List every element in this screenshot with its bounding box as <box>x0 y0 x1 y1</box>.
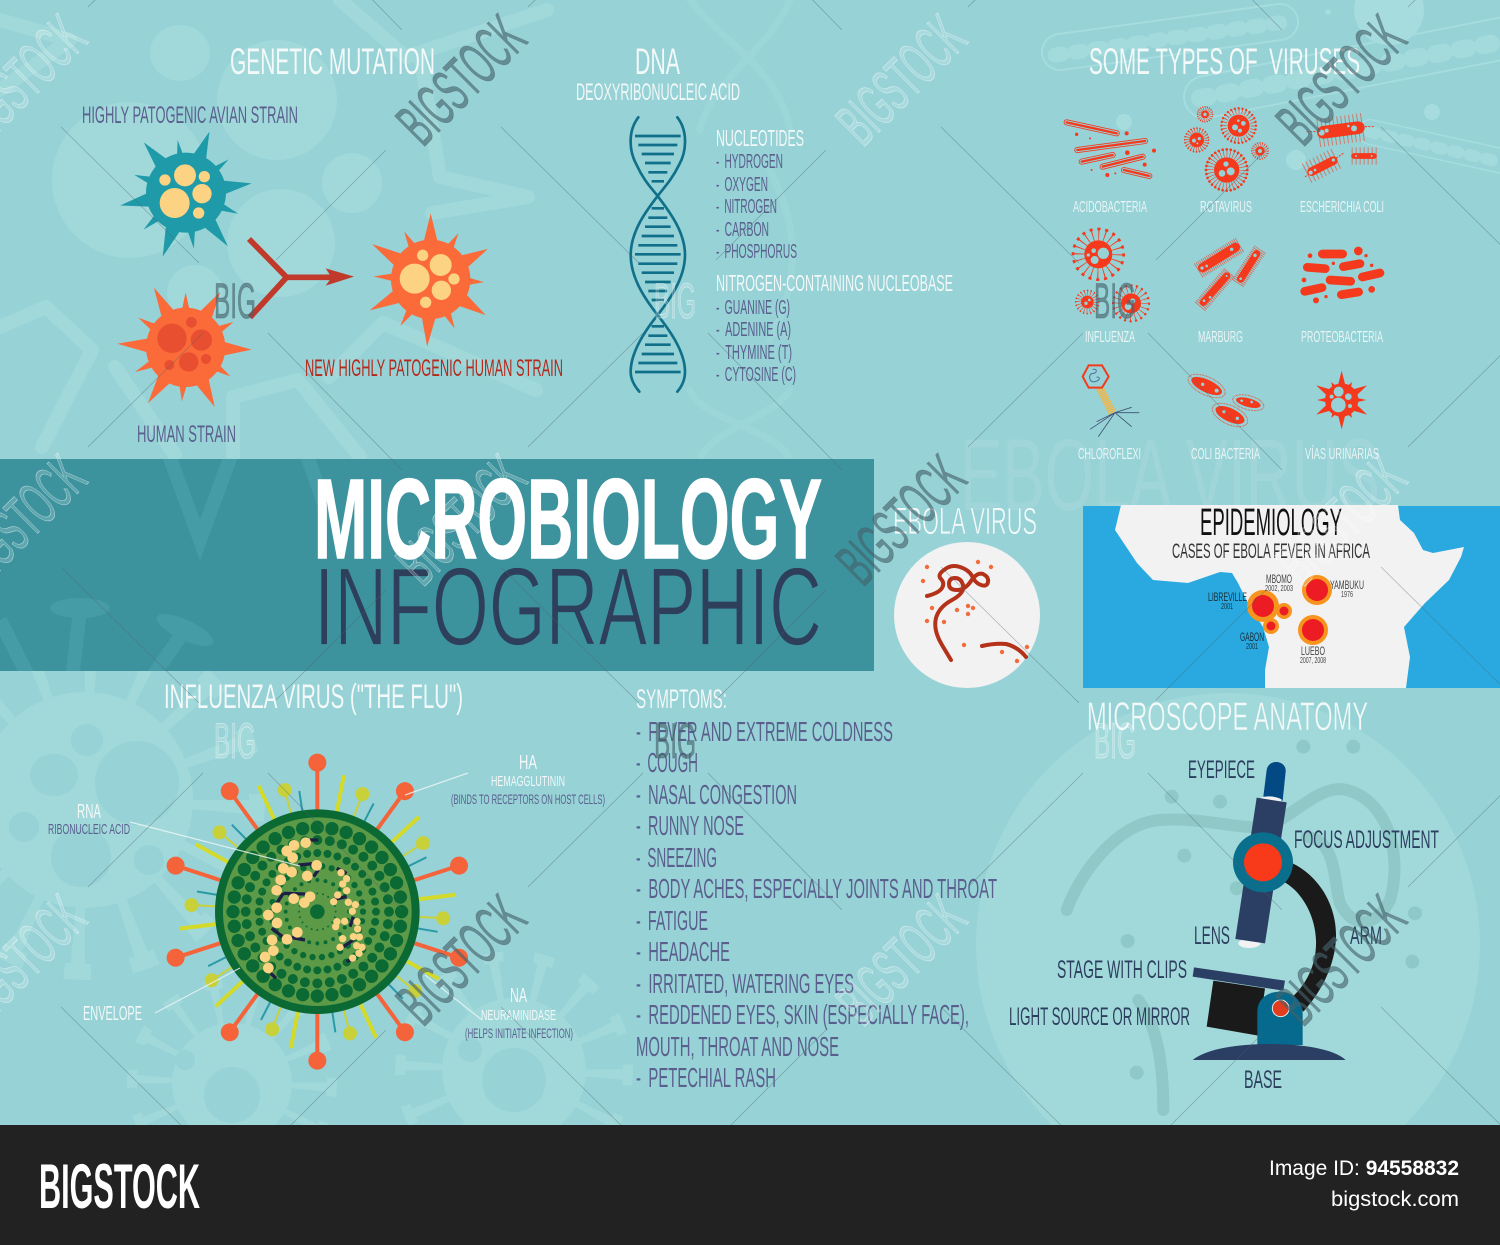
text block: symptoms: - FATIGUE <box>636 905 708 936</box>
outbreak markers <box>1247 575 1332 645</box>
text block: symptoms: MOUTH, THROAT AND NOSE <box>636 1031 839 1062</box>
virus labels: VÍAS URINARIAS <box>1305 444 1379 463</box>
panel: epidemiology map <box>1083 502 1500 688</box>
outbreak labels: 2001 <box>1246 642 1258 651</box>
text block: symptoms: - REDDENED EYES, SKIN (ESPECIALLY FACE), <box>636 999 969 1030</box>
panel: epidemiology map: EPIDEMIOLOGY <box>1200 502 1342 544</box>
virus labels: CHLOROFLEXI <box>1078 446 1141 463</box>
text block: symptoms: - RUNNY NOSE <box>636 810 744 841</box>
microscope labels: LENS <box>1194 922 1230 950</box>
text block: nucleobases: NITROGEN-CONTAINING NUCLEOBASE <box>716 270 953 296</box>
text block: nucleotides: - CARBON <box>716 219 769 241</box>
label: HA: HA <box>519 752 537 774</box>
icon: rotavirus <box>1185 107 1268 191</box>
text block: nucleobases: - THYMINE (T) <box>716 342 792 364</box>
text block: nucleotides <box>716 125 804 263</box>
text block: symptoms: - COUGH <box>636 747 698 778</box>
virus labels: ESCHERICHIA COLI <box>1300 199 1384 216</box>
label: envelope: ENVELOPE <box>83 1003 142 1025</box>
icon: new human strain virus <box>366 213 492 347</box>
watermarks: BIG <box>1094 713 1136 769</box>
icon: orange human virus <box>117 284 252 410</box>
heading: INFLUENZA VIRUS ("THE FLU") <box>164 678 463 716</box>
label: RNA: RIBONUCLEIC ACID <box>48 821 130 838</box>
label: human strain: HUMAN STRAIN <box>137 421 236 448</box>
panel: genetic mutation <box>82 41 563 448</box>
label: NA: (HELPS INITIATE INFECTION) <box>465 1025 573 1041</box>
microscope labels: LIGHT SOURCE OR MIRROR <box>1009 1003 1190 1031</box>
text block: symptoms: - PETECHIAL RASH <box>636 1062 776 1093</box>
label: HA: (BINDS TO RECEPTORS ON HOST CELLS) <box>451 791 605 807</box>
watermarks: BIG <box>1094 273 1136 329</box>
label: HA <box>451 752 605 807</box>
text block: symptoms: - HEADACHE <box>636 936 730 967</box>
icon: acidobacteria <box>1067 122 1156 177</box>
map of Africa <box>1083 505 1500 688</box>
panel: DNA <box>576 41 953 392</box>
image id: Image ID: 94558832 <box>1269 1157 1459 1180</box>
panel: influenza virus <box>48 678 605 1073</box>
microscope labels: BASE <box>1244 1066 1282 1094</box>
outbreak labels: GABON <box>1240 630 1264 644</box>
icon: ebola filament <box>894 542 1040 688</box>
text block: nucleobases: - ADENINE (A) <box>716 319 791 341</box>
icon: marburg <box>1198 245 1260 307</box>
virus labels: MARBURG <box>1198 329 1243 346</box>
outbreak labels <box>1208 572 1364 665</box>
label: avian strain: HIGHLY PATOGENIC AVIAN STRAIN <box>82 102 298 129</box>
label: NA: NA <box>510 985 527 1007</box>
label: RNA <box>48 801 130 838</box>
site url: bigstock.com <box>1331 1188 1459 1211</box>
label: NA: NEURAMINIDASE <box>481 1007 556 1024</box>
icon: vias urinarias <box>1314 371 1369 429</box>
text block: nucleotides: NUCLEOTIDES <box>716 125 804 151</box>
text block: symptoms: - BODY ACHES, ESPECIALLY JOINTS AND THROAT <box>636 873 997 904</box>
watermarks: BIG <box>214 273 256 329</box>
outbreak labels: 2007, 2008 <box>1300 656 1326 665</box>
watermarks <box>0 3 1419 1038</box>
right cell ghost <box>976 693 1480 1197</box>
virus labels: ROTAVIRUS <box>1200 199 1252 216</box>
arrow: strains merging <box>249 239 354 317</box>
label: HA: HEMAGGLUTININ <box>491 773 565 790</box>
text block: symptoms: - SNEEZING <box>636 842 717 873</box>
bacillus chains <box>1055 22 1500 165</box>
text block: nucleobases: - GUANINE (G) <box>716 297 790 319</box>
title: Microbiology: MICROBIOLOGY <box>314 456 822 582</box>
subheading: DEOXYRIBONUCLEIC ACID <box>576 79 740 106</box>
virus labels: COLI BACTERIA <box>1191 446 1260 463</box>
label: RNA: RNA <box>77 801 101 823</box>
microscope labels: STAGE WITH CLIPS <box>1057 956 1187 984</box>
outbreak labels: LUEBO <box>1301 644 1325 658</box>
watermarks: BIGSTOCK <box>384 443 539 598</box>
text block: symptoms: - IRRITATED, WATERING EYES <box>636 968 854 999</box>
icon: double helix <box>631 117 685 392</box>
watermarks: BIG <box>654 713 696 769</box>
text block: symptoms: - NASAL CONGESTION <box>636 779 797 810</box>
watermarks: BIG <box>654 273 696 329</box>
icon: microscope <box>1193 762 1346 1060</box>
left flu ghost <box>0 628 257 972</box>
heading: DNA <box>635 41 680 82</box>
label: NA <box>465 985 573 1041</box>
footer bar: BIGSTOCK <box>39 1152 200 1222</box>
outbreak labels: 2001 <box>1221 602 1233 611</box>
outbreak labels: 1976 <box>1341 590 1353 599</box>
heading: GENETIC MUTATION <box>230 41 435 82</box>
DNA ghost <box>690 0 792 460</box>
central title banner <box>0 450 874 680</box>
watermarks: BIGSTOCK <box>824 883 979 1038</box>
footer bar <box>0 1125 1500 1245</box>
outbreak labels: LIBREVILLE <box>1208 590 1247 604</box>
heading: EBOLA VIRUS <box>893 501 1037 543</box>
microscope labels: ARM <box>1350 922 1382 950</box>
icon: escherichia coli <box>1305 125 1378 177</box>
RNA strand <box>260 837 366 978</box>
outbreak labels: 2002, 2003 <box>1265 584 1293 593</box>
label: new strain: NEW HIGHLY PATOGENIC HUMAN STRAIN <box>305 355 563 382</box>
virus labels <box>1073 199 1384 463</box>
microscope labels <box>1009 756 1439 1094</box>
panel: microscope anatomy <box>1009 695 1439 1094</box>
icon: coli bacteria <box>1185 369 1266 431</box>
outbreak labels: YAMBUKU <box>1330 578 1364 592</box>
microscope labels: EYEPIECE <box>1188 756 1255 784</box>
icon: influenza virion <box>150 751 485 1073</box>
icon: chloroflexi phage <box>1083 365 1139 437</box>
virus labels: INFLUENZA <box>1085 329 1135 346</box>
panel: ebola virus <box>893 501 1040 688</box>
title: Infographic: INFOGRAPHIC <box>314 545 822 669</box>
icon: proteobacteria <box>1302 247 1380 303</box>
callout lines <box>130 773 482 1020</box>
watermarks: BIGSTOCK <box>384 883 539 1038</box>
watermarks: BIGSTOCK <box>824 443 979 598</box>
text block: nucleotides: - NITROGEN <box>716 196 777 218</box>
text block: nucleotides: - HYDROGEN <box>716 151 783 173</box>
text block: symptoms: - FEVER AND EXTREME COLDNESS <box>636 716 893 747</box>
text block: symptoms <box>636 684 997 1093</box>
text block: symptoms: SYMPTOMS: <box>636 684 727 714</box>
text block: nucleobases: - CYTOSINE (C) <box>716 364 796 386</box>
outbreak labels: MBOMO <box>1266 572 1292 586</box>
virus labels: PROTEOBACTERIA <box>1301 329 1383 346</box>
text block: nucleobases <box>716 270 953 386</box>
watermarks: BIG <box>214 713 256 769</box>
text block: nucleotides: - OXYGEN <box>716 174 768 196</box>
text block: nucleotides: - PHOSPHORUS <box>716 241 797 263</box>
icon: influenza <box>1073 229 1149 321</box>
panel: some types of viruses <box>1067 41 1384 463</box>
icon: teal avian virus <box>119 129 253 260</box>
virus labels: ACIDOBACTERIA <box>1073 199 1147 216</box>
